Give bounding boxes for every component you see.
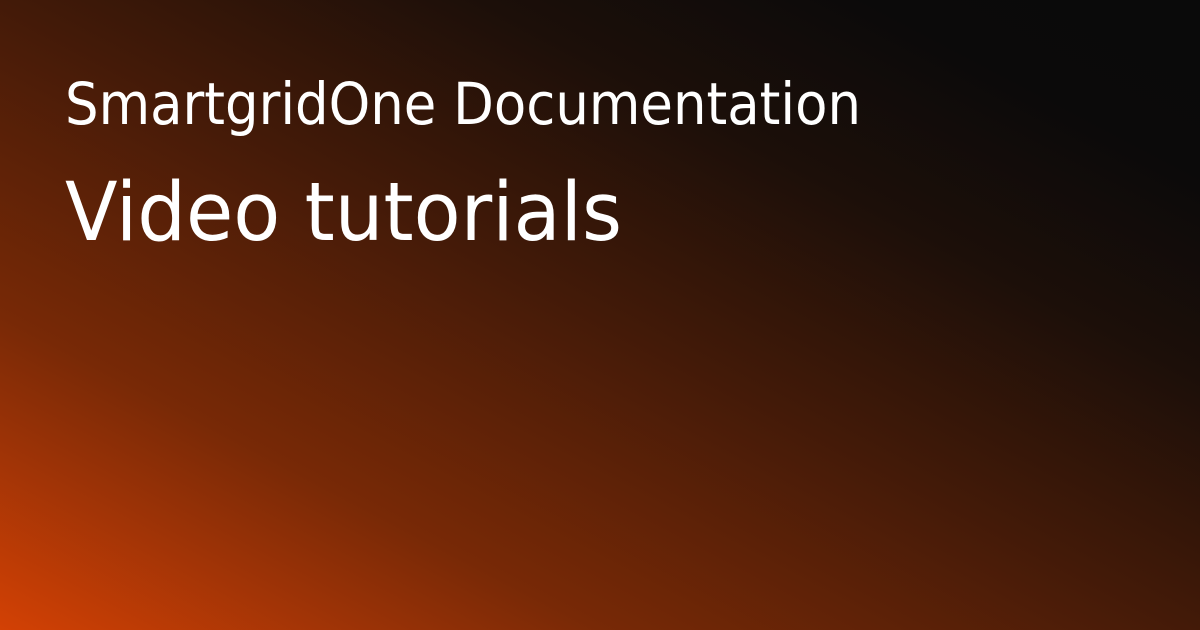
page heading: Video tutorials <box>65 166 622 260</box>
site title: SmartgridOne Documentation <box>65 70 861 138</box>
